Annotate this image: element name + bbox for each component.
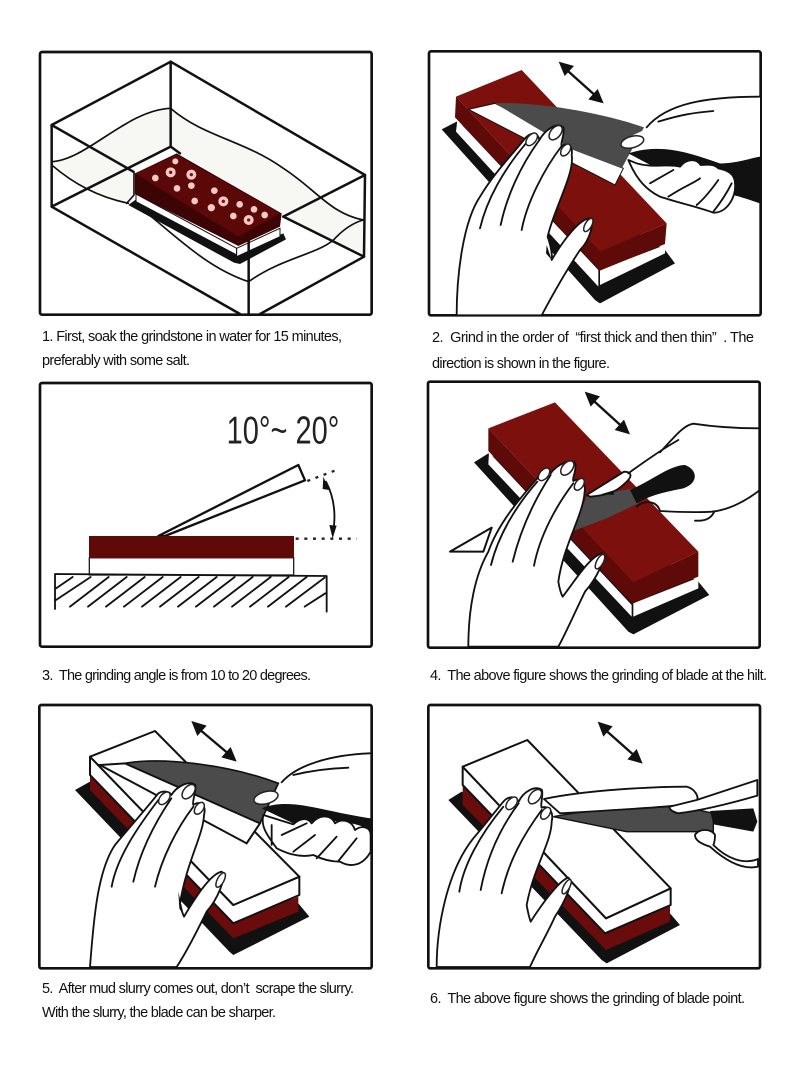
arrow 4 [585, 392, 630, 434]
grindstone in water [128, 153, 286, 264]
caption 3: 3. The grinding angle is from 10 to 20 degrees. [42, 668, 311, 684]
water tint [52, 108, 364, 253]
water surface waves [52, 108, 363, 282]
panel 5: keep the slurry [39, 705, 372, 968]
stone 6 [448, 740, 680, 963]
caption 1: 1. First, soak the grindstone in water for 15 minutes, [42, 329, 342, 345]
arrow 6 [598, 722, 643, 764]
right hand 4 [587, 424, 759, 521]
hatched base [55, 574, 327, 612]
left hand 6 [437, 787, 573, 967]
panel 2: grind direction [429, 51, 761, 315]
caption 2: 2. Grind in the order of “first thick and then thin” . The [432, 330, 754, 346]
frame 4 [428, 382, 760, 648]
stone 2 [442, 70, 675, 303]
frame 1 [40, 52, 372, 315]
caption 1: preferably with some salt. [42, 353, 190, 369]
salt crystals [152, 158, 268, 225]
panel 1: soaking the stone [40, 52, 372, 315]
caption 5 [42, 981, 354, 1021]
caption 5: 5. After mud slurry comes out, don’t scrape the slurry. [42, 981, 354, 997]
right hand 2 [620, 97, 760, 213]
knife 6 [553, 807, 757, 832]
caption 6: 6. The above figure shows the grinding of blade point. [430, 991, 745, 1007]
stone 5 [75, 731, 309, 955]
right hand 6 [544, 780, 758, 867]
frame 5 [39, 705, 372, 968]
caption 1 [42, 329, 342, 369]
angle guides and arc arrow [296, 469, 357, 539]
panel 4: grinding at the hilt [428, 382, 760, 648]
knife 2 [468, 103, 760, 203]
stone side view [89, 536, 294, 575]
caption 2: direction is shown in the figure. [432, 356, 610, 372]
knife 5 [100, 761, 371, 843]
panel 3: grinding angle [40, 383, 372, 647]
arrow 2 [559, 62, 604, 103]
frame 6 [428, 705, 760, 968]
water tank outline [52, 62, 365, 314]
blade at angle [158, 465, 305, 536]
blade tip 4 [450, 528, 492, 552]
knife 4 [572, 465, 695, 532]
frame 3 [40, 383, 372, 647]
arrow 5 [191, 721, 237, 762]
left hand 2 [457, 123, 595, 315]
stone 4 [474, 402, 709, 634]
frame 2 [429, 51, 761, 315]
caption 5: With the slurry, the blade can be sharper. [42, 1005, 276, 1021]
caption 4: 4. The above figure shows the grinding of blade at the hilt. [430, 668, 767, 684]
left hand 5 [90, 782, 227, 967]
panel 6: grinding the point [428, 705, 760, 968]
left hand 4 [468, 458, 607, 647]
right hand 5 [253, 753, 371, 865]
caption 2 [432, 330, 754, 372]
angle label: 10°~ 20° [227, 408, 339, 452]
